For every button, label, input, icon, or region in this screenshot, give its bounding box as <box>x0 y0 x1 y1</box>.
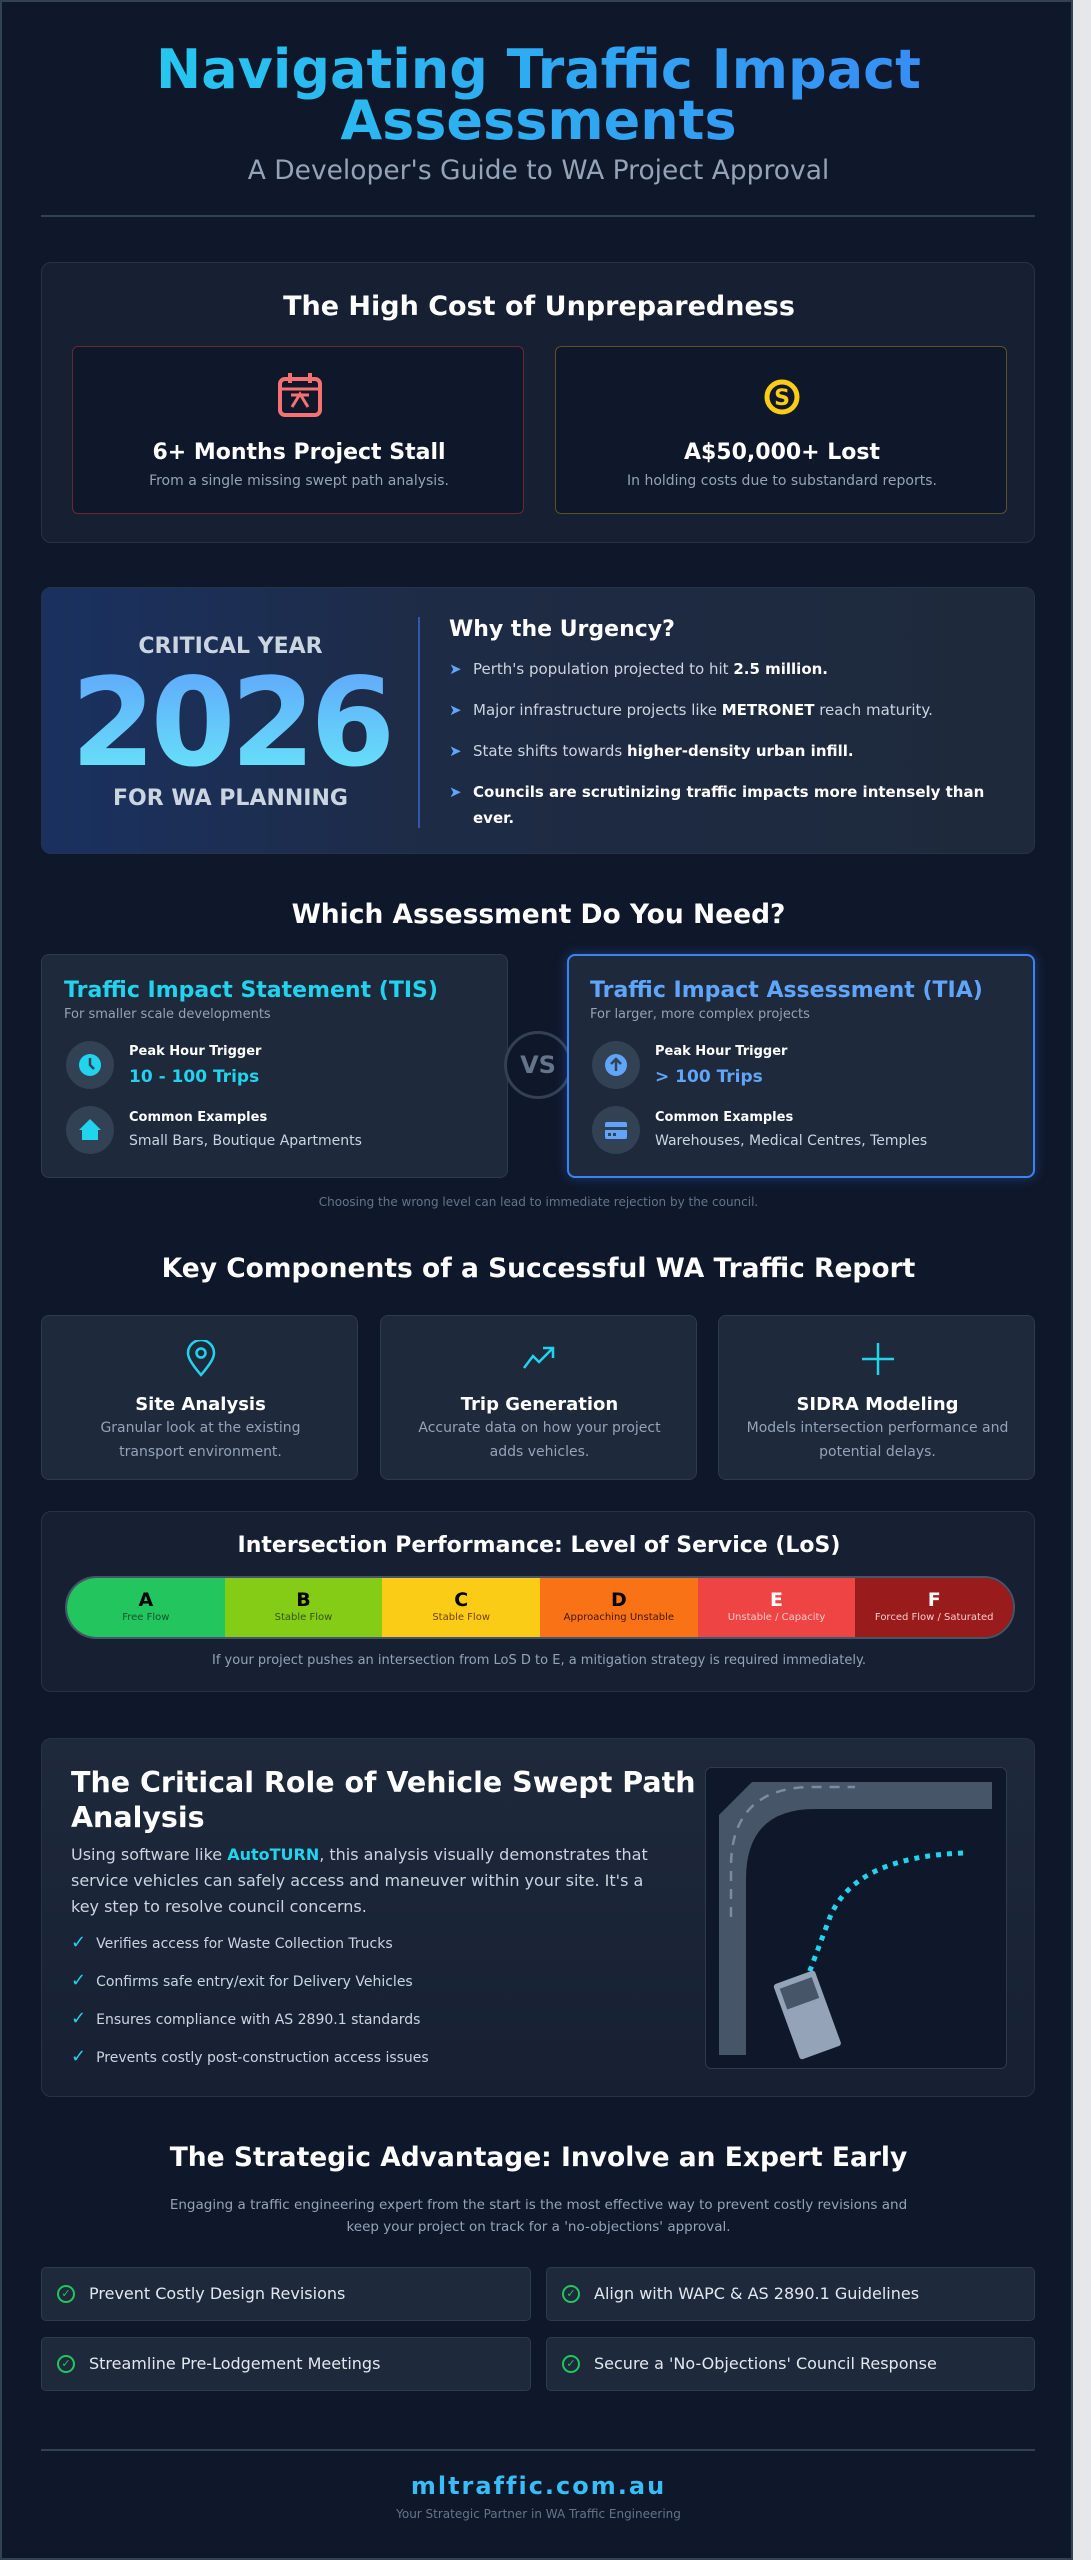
heading: which assessment: Which Assessment Do You Need? <box>292 899 785 930</box>
LoS bar: D <box>611 1589 627 1611</box>
LoS bar: Approaching Unstable <box>564 1612 674 1623</box>
icon: trend <box>523 1346 554 1369</box>
card: months stall: From a single missing swept path analysis. <box>149 473 449 489</box>
card: TIA: Peak Hour Trigger <box>655 1044 787 1059</box>
urgency list: Major infrastructure projects like METRONET reach maturity. <box>473 701 933 719</box>
urgency list: State shifts towards higher-density urban infill. <box>473 742 854 760</box>
panel: swept path <box>41 1738 1035 2097</box>
panel: high cost <box>41 262 1035 543</box>
panel: swept path: Analysis <box>71 1801 205 1834</box>
LoS bar: Stable Flow <box>275 1612 332 1623</box>
card: TIS <box>41 954 508 1178</box>
icon: dollar coin <box>764 380 800 414</box>
card: TIA: Common Examples <box>655 1110 793 1125</box>
panel: level of service: If your project pushes an intersection from LoS D to E, a mitigation strategy is required immediately. <box>212 1653 866 1668</box>
card: TIS: Common Examples <box>129 1110 267 1125</box>
card: money lost: In holding costs due to substandard reports. <box>627 473 937 489</box>
benefit grid: ✓ <box>566 2357 576 2370</box>
panel: swept path: Using software like AutoTURN, this analysis visually demonstrates that service vehicles can safely access and maneuver within your site. It's a key step to resolve council concerns. <box>71 1845 648 1916</box>
icon: plus <box>862 1343 894 1375</box>
illustration: swept path <box>705 1767 1007 2069</box>
icon: pin <box>186 1340 216 1377</box>
LoS bar: F <box>928 1589 941 1611</box>
VS badge <box>504 1031 572 1099</box>
heading: key components: Key Components of a Successful WA Traffic Report <box>162 1253 915 1284</box>
benefit grid <box>41 2267 1035 2391</box>
footer <box>396 2472 681 2521</box>
footer: mltraffic.com.au <box>411 2472 666 2500</box>
heading: high cost: The High Cost of Unpreparedness <box>283 291 795 322</box>
card: SIDRA <box>718 1315 1035 1480</box>
LoS bar: Free Flow <box>122 1612 169 1623</box>
urgency list: ➤ <box>449 783 462 801</box>
card: money lost <box>555 346 1007 514</box>
panel: level of service: Intersection Performance: Level of Service (LoS) <box>238 1533 840 1558</box>
benefit grid: Secure a 'No-Objections' Council Response <box>594 2354 937 2373</box>
panel: level of service <box>41 1511 1035 1692</box>
LoS bar: B <box>296 1589 311 1611</box>
checklist <box>71 1932 429 2067</box>
card: site analysis: Site Analysis <box>135 1394 266 1415</box>
card: SIDRA: Models intersection performance and potential delays. <box>747 1420 1008 1460</box>
icon: arrow up <box>592 1041 640 1089</box>
checklist: ✓ Verifies access for Waste Collection Trucks <box>71 1932 393 1953</box>
critical year block: CRITICAL YEAR <box>138 634 323 659</box>
benefit grid: Prevent Costly Design Revisions <box>89 2284 345 2303</box>
card: SIDRA: SIDRA Modeling <box>796 1394 959 1415</box>
LoS bar: Forced Flow / Saturated <box>875 1612 993 1623</box>
text: stall: 6+ Months Project Stall <box>152 440 446 465</box>
card: TIA: Traffic Impact Assessment (TIA) <box>590 978 983 1003</box>
card: TIA: Warehouses, Medical Centres, Temples <box>655 1133 927 1149</box>
benefit grid: Align with WAPC & AS 2890.1 Guidelines <box>594 2284 919 2303</box>
urgency list: ➤ <box>449 742 462 760</box>
urgency list: Why the Urgency? <box>449 617 675 642</box>
VS badge: VS <box>520 1051 556 1079</box>
card: TIS: 10 - 100 Trips <box>129 1067 259 1087</box>
icon: clock <box>66 1041 114 1089</box>
urgency list <box>449 617 984 827</box>
urgency list: Councils are scrutinizing traffic impacts more intensely than ever. <box>473 783 984 827</box>
card: TIA: > 100 Trips <box>655 1067 763 1087</box>
urgency list: ➤ <box>449 701 462 719</box>
checklist: ✓ Confirms safe entry/exit for Delivery Vehicles <box>71 1970 413 1991</box>
title: Navigating Traffic Impact <box>156 38 921 101</box>
benefit grid: ✓ <box>566 2287 576 2300</box>
LoS bar <box>65 1576 1015 1639</box>
card: TIS: Small Bars, Boutique Apartments <box>129 1133 362 1149</box>
card: trip generation: Accurate data on how your project adds vehicles. <box>418 1420 661 1460</box>
LoS bar: Stable Flow <box>432 1612 490 1623</box>
benefit grid: ✓ <box>61 2287 71 2300</box>
text: strategic intro: Engaging a traffic engineering expert from the start is the most effective way to prevent costly revisions and <box>170 2197 907 2213</box>
card: TIS: For smaller scale developments <box>64 1007 271 1022</box>
card: trip generation <box>380 1315 697 1480</box>
card: trip generation: Trip Generation <box>461 1394 618 1415</box>
checklist: ✓ Prevents costly post-construction access issues <box>71 2046 429 2067</box>
critical year block: FOR WA PLANNING <box>113 786 348 811</box>
icon: calendar <box>278 373 322 417</box>
card: months stall <box>72 346 524 514</box>
LoS bar: A <box>138 1589 153 1611</box>
urgency list: ➤ <box>449 660 462 678</box>
LoS bar: C <box>454 1589 468 1611</box>
footer: Your Strategic Partner in WA Traffic Engineering <box>396 2507 681 2521</box>
text: lost: A$50,000+ Lost <box>684 440 880 465</box>
note: wrong level: Choosing the wrong level can lead to immediate rejection by the council. <box>319 1195 758 1209</box>
text: strategic intro: keep your project on track for a 'no-objections' approval. <box>346 2219 731 2235</box>
panel: 2026 <box>41 587 1035 854</box>
icon: dollar coin: S <box>774 386 790 411</box>
title: Assessments <box>340 89 737 152</box>
checklist: ✓ Ensures compliance with AS 2890.1 standards <box>71 2008 420 2029</box>
panel: swept path: The Critical Role of Vehicle Swept Path <box>71 1766 696 1799</box>
card: site analysis <box>41 1315 358 1480</box>
card: TIA: For larger, more complex projects <box>590 1007 810 1022</box>
benefit grid: ✓ <box>61 2357 71 2370</box>
card: TIS: Traffic Impact Statement (TIS) <box>64 978 438 1003</box>
LoS bar: Unstable / Capacity <box>728 1612 825 1623</box>
LoS bar: E <box>770 1589 783 1611</box>
card: TIS: Peak Hour Trigger <box>129 1044 261 1059</box>
card: TIA <box>567 954 1035 1178</box>
card: site analysis: Granular look at the existing transport environment. <box>100 1420 301 1460</box>
urgency list: Perth's population projected to hit 2.5 million. <box>473 660 828 678</box>
critical year block: 2026 <box>71 652 390 794</box>
benefit grid: Streamline Pre-Lodgement Meetings <box>89 2354 380 2373</box>
icon: house <box>66 1106 114 1154</box>
heading: strategic advantage: The Strategic Advantage: Involve an Expert Early <box>170 2142 907 2173</box>
text: strategic intro <box>170 2197 907 2235</box>
title <box>2 44 1075 146</box>
icon: building <box>592 1106 640 1154</box>
subtitle: A Developer's Guide to WA Project Approval <box>248 155 829 186</box>
